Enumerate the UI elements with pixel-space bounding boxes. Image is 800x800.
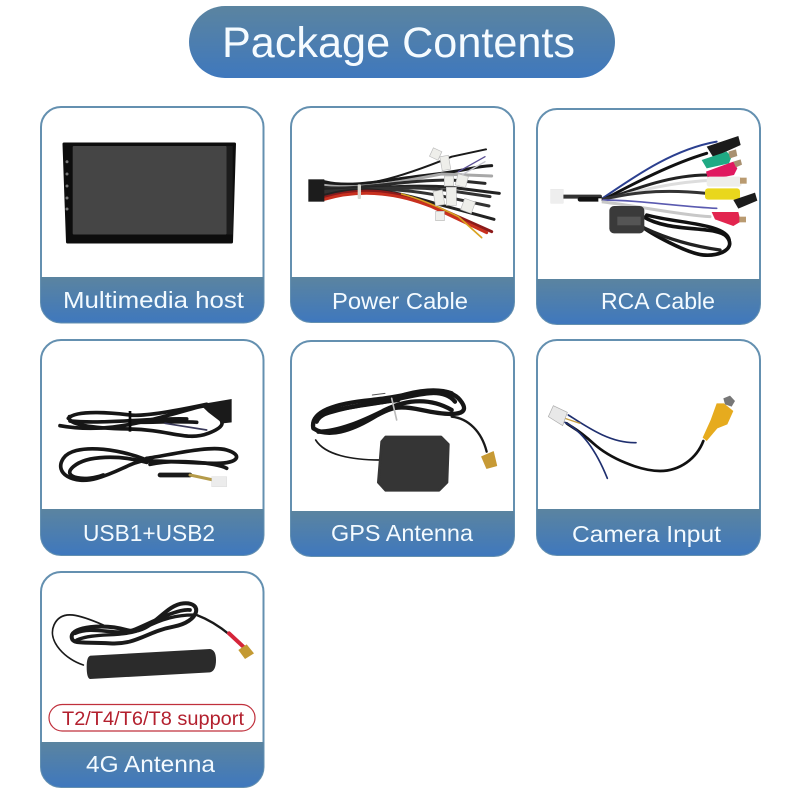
callout: network support: T2/T4/T6/T8 support	[62, 708, 245, 730]
label: Power Cable	[332, 288, 468, 314]
panel: RCA cable	[537, 109, 760, 324]
label band	[291, 277, 514, 322]
icon: RCA harness	[551, 136, 757, 255]
icon: GPS antenna	[313, 390, 497, 490]
panel: multimedia host	[41, 107, 264, 322]
label band	[291, 511, 514, 556]
label band	[537, 279, 760, 324]
icon: 4G antenna	[52, 603, 254, 679]
icon: camera cable	[548, 396, 735, 478]
label band	[537, 509, 760, 555]
label band	[41, 742, 264, 787]
label: USB1+USB2	[83, 520, 215, 546]
title: Package Contents	[222, 19, 575, 67]
panel: camera input	[537, 340, 760, 555]
icon: wiring harness	[308, 148, 499, 238]
title	[189, 6, 615, 78]
label: 4G Antenna	[86, 751, 215, 777]
icon: head unit screen	[64, 144, 234, 242]
panel: power cable	[291, 107, 514, 322]
panel: USB cables	[41, 340, 264, 555]
label: Camera Input	[572, 521, 722, 547]
label: GPS Antenna	[331, 520, 473, 546]
icon: USB cables	[60, 399, 237, 487]
label band	[41, 277, 264, 322]
panel: GPS antenna	[291, 341, 514, 556]
panel: 4G antenna	[41, 572, 264, 787]
label: RCA Cable	[601, 288, 715, 314]
label band	[41, 509, 264, 555]
label: Multimedia host	[63, 287, 245, 313]
